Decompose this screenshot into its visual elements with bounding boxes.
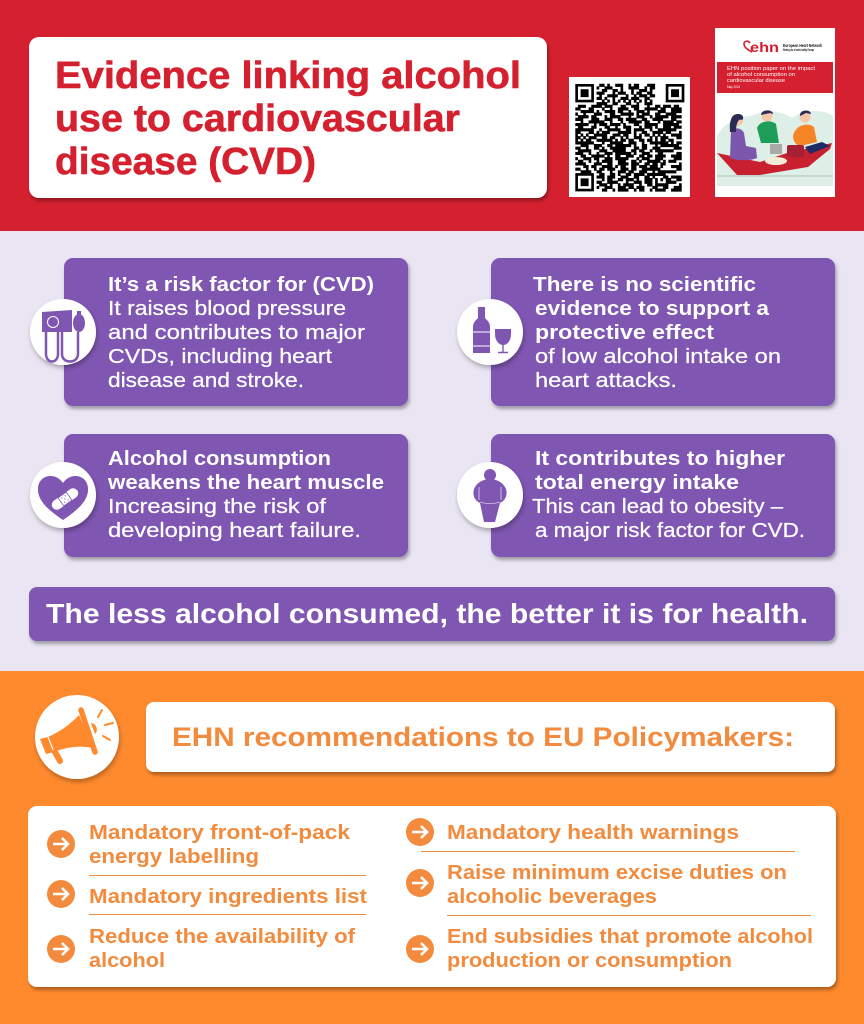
- card text: protective effect: [535, 321, 714, 344]
- item: ingredients list: Mandatory ingredients list: [89, 885, 367, 908]
- card text: [532, 447, 805, 542]
- cover logo: Working for a heart-healthy Europe: [783, 48, 814, 52]
- item: health warnings: Mandatory health warnings: [447, 821, 739, 844]
- cover title band: May 2024: [727, 85, 740, 89]
- card text: [533, 273, 781, 392]
- card text: heart attacks.: [535, 369, 677, 392]
- recommendations card: [28, 806, 836, 987]
- cover title band: of alcohol consumption on: [727, 72, 795, 78]
- icon: blood pressure monitor: [30, 299, 96, 365]
- cover logo: ehn: [750, 39, 779, 55]
- item: subsidies: production or consumption: [447, 949, 732, 972]
- cover title band: cardiovascular disease: [727, 78, 785, 84]
- card text: It’s a risk factor for (CVD): [108, 273, 374, 296]
- panel: recommendations: [0, 671, 864, 1024]
- title: use to cardiovascular: [55, 98, 460, 140]
- heading card: [146, 702, 835, 772]
- item: ingredients list: [47, 880, 367, 908]
- panel: key facts: [0, 231, 864, 671]
- item: health warnings: [406, 818, 739, 846]
- title: [55, 55, 521, 183]
- icon: megaphone: [35, 695, 119, 779]
- banner: key message: [29, 587, 835, 641]
- card text: and contributes to major: [108, 321, 365, 344]
- title: Evidence linking alcohol: [55, 55, 521, 97]
- item: excise duties: [406, 861, 787, 908]
- icon: bottle and glass: [457, 299, 523, 365]
- item: availability: alcohol: [89, 949, 165, 972]
- icon: bandaged heart: [30, 462, 96, 528]
- cover logo: European Heart Network: [783, 43, 823, 48]
- heading card: EHN recommendations to EU Policymakers:: [172, 722, 794, 752]
- item: availability: [47, 925, 355, 972]
- card text: [108, 273, 374, 392]
- card text: It contributes to higher: [535, 447, 785, 470]
- card text: It raises blood pressure: [108, 297, 346, 320]
- item: excise duties: Raise minimum excise duties on: [447, 861, 787, 884]
- item: energy labelling: energy labelling: [89, 845, 259, 868]
- cover logo: [744, 39, 823, 55]
- card text: disease and stroke.: [108, 369, 304, 392]
- card text: There is no scientific: [533, 273, 756, 296]
- card text: Increasing the risk of: [108, 495, 326, 518]
- item: subsidies: End subsidies that promote alcohol: [447, 925, 813, 948]
- cover title band: [717, 62, 833, 93]
- card text: total energy intake: [535, 471, 739, 494]
- item: availability: Reduce the availability of: [89, 925, 355, 948]
- QR code: [569, 77, 690, 197]
- item: energy labelling: [47, 821, 351, 868]
- item: energy labelling: Mandatory front-of-pack: [89, 821, 351, 844]
- icon: obese figure: [457, 462, 523, 528]
- card: risk factor: [30, 258, 408, 406]
- item: subsidies: [406, 925, 813, 972]
- report cover: [715, 28, 835, 197]
- card text: This can lead to obesity –: [532, 495, 784, 518]
- card: weakens heart muscle: [30, 434, 408, 557]
- title: disease (CVD): [55, 141, 316, 183]
- card: energy intake: [457, 434, 835, 557]
- banner: key message: The less alcohol consumed, the better it is for health.: [46, 598, 808, 629]
- cover illustration: people picnicking: [717, 110, 833, 186]
- card text: developing heart failure.: [108, 519, 361, 542]
- card text: evidence to support a: [535, 297, 770, 320]
- card text: of low alcohol intake on: [535, 345, 781, 368]
- card text: a major risk factor for CVD.: [535, 519, 805, 542]
- cover title band: EHN position paper on the impact: [727, 66, 816, 72]
- title card: [29, 37, 547, 198]
- card text: [107, 447, 384, 542]
- card text: weakens the heart muscle: [107, 471, 384, 494]
- panel: header band: [0, 0, 864, 231]
- card: no protective effect: [457, 258, 835, 406]
- item: excise duties: alcoholic beverages: [447, 885, 657, 908]
- card text: CVDs, including heart: [108, 345, 332, 368]
- card text: Alcohol consumption: [108, 447, 331, 470]
